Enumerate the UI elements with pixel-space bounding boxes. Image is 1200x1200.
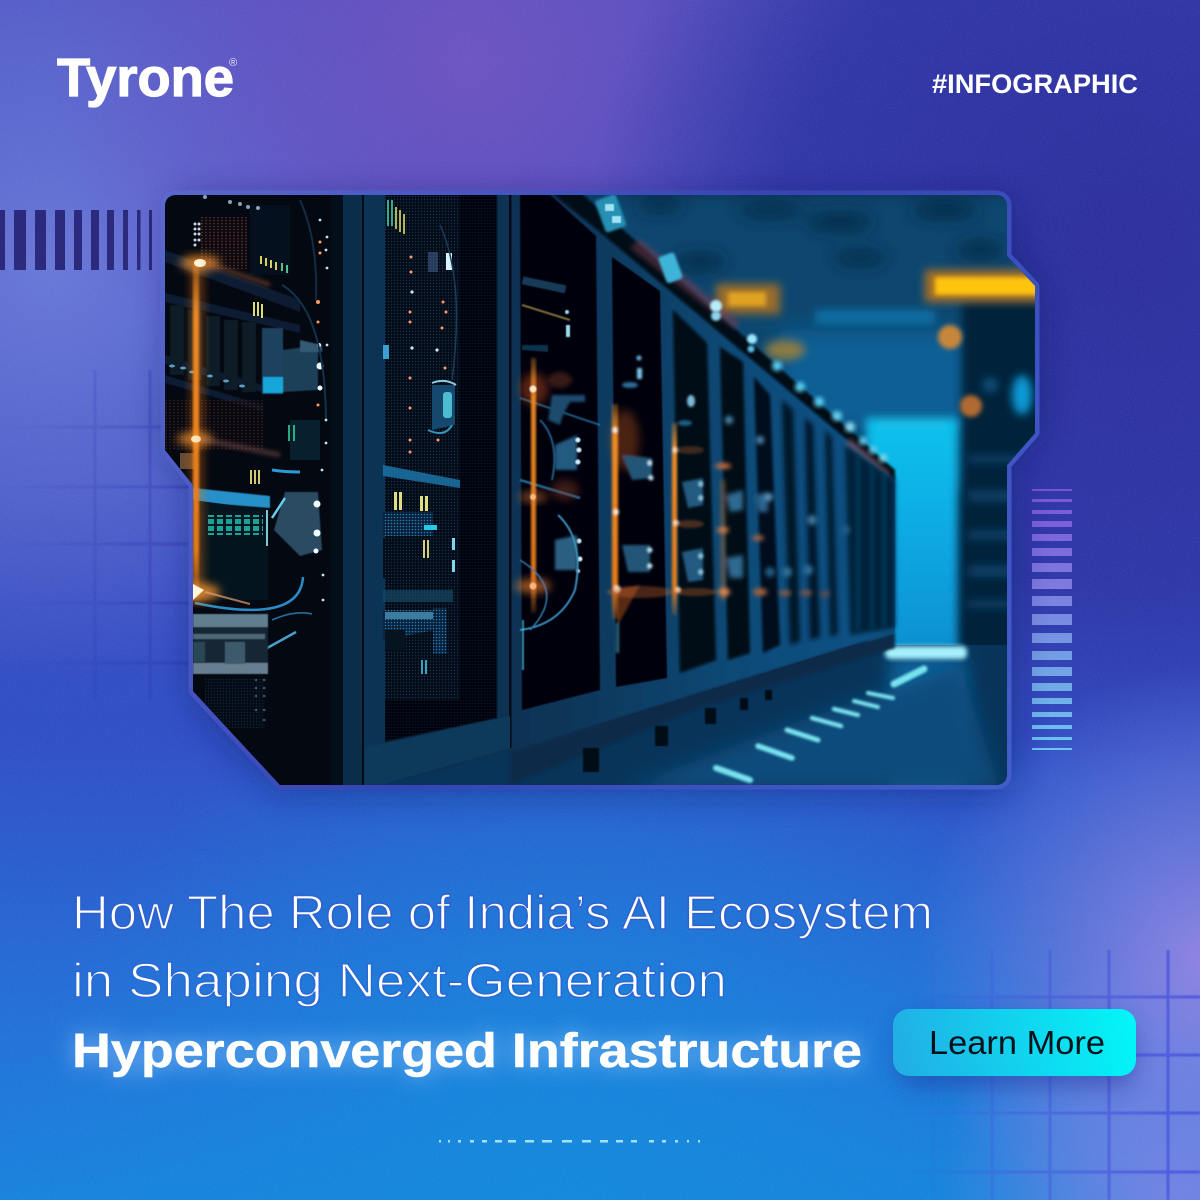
aisle backdrop bbox=[160, 190, 1042, 790]
title line 3 bold: Hyperconverged Infrastructure bbox=[72, 1024, 862, 1078]
logo: Tyrone: Tyrone bbox=[57, 48, 234, 108]
second rack equipment bbox=[383, 195, 460, 700]
panel shadow bbox=[165, 200, 1040, 790]
photo frame bbox=[165, 195, 1035, 785]
title line 1: How The Role of India’s AI Ecosystem bbox=[72, 886, 933, 940]
logo: Tyrone: ® bbox=[229, 57, 237, 69]
ceiling lights bbox=[716, 270, 1045, 417]
right stacked bars decoration bbox=[1032, 489, 1072, 750]
learn more button: Learn More bbox=[929, 1024, 1105, 1061]
fourth rack equipment bbox=[606, 356, 674, 653]
floor light streaks bbox=[716, 669, 924, 780]
photo: server racks in data centre bbox=[160, 190, 1045, 790]
rack top strip bbox=[548, 190, 895, 480]
rack feet bbox=[583, 690, 772, 772]
title line 2: in Shaping Next-Generation bbox=[72, 954, 727, 1008]
rack panels bbox=[382, 190, 895, 742]
rack row body bbox=[343, 190, 895, 790]
learn more button bbox=[893, 1009, 1136, 1086]
bottom dashed divider bbox=[439, 1140, 700, 1142]
left barcode decoration bbox=[0, 210, 152, 270]
rack top blue lights bbox=[595, 194, 887, 462]
rack dividers bbox=[362, 190, 512, 790]
hashtag label: #INFOGRAPHIC bbox=[932, 69, 1138, 99]
fifth rack equipment bbox=[672, 395, 717, 615]
left grid pattern bbox=[74, 370, 188, 699]
title text bbox=[72, 886, 933, 1078]
orange light streak: first rack bbox=[176, 255, 280, 604]
bottom-right grid pattern bbox=[952, 950, 1200, 1200]
left rack equipment bbox=[160, 190, 510, 790]
far rack equipment (blurred) bbox=[715, 416, 850, 600]
third rack equipment bbox=[515, 276, 600, 670]
